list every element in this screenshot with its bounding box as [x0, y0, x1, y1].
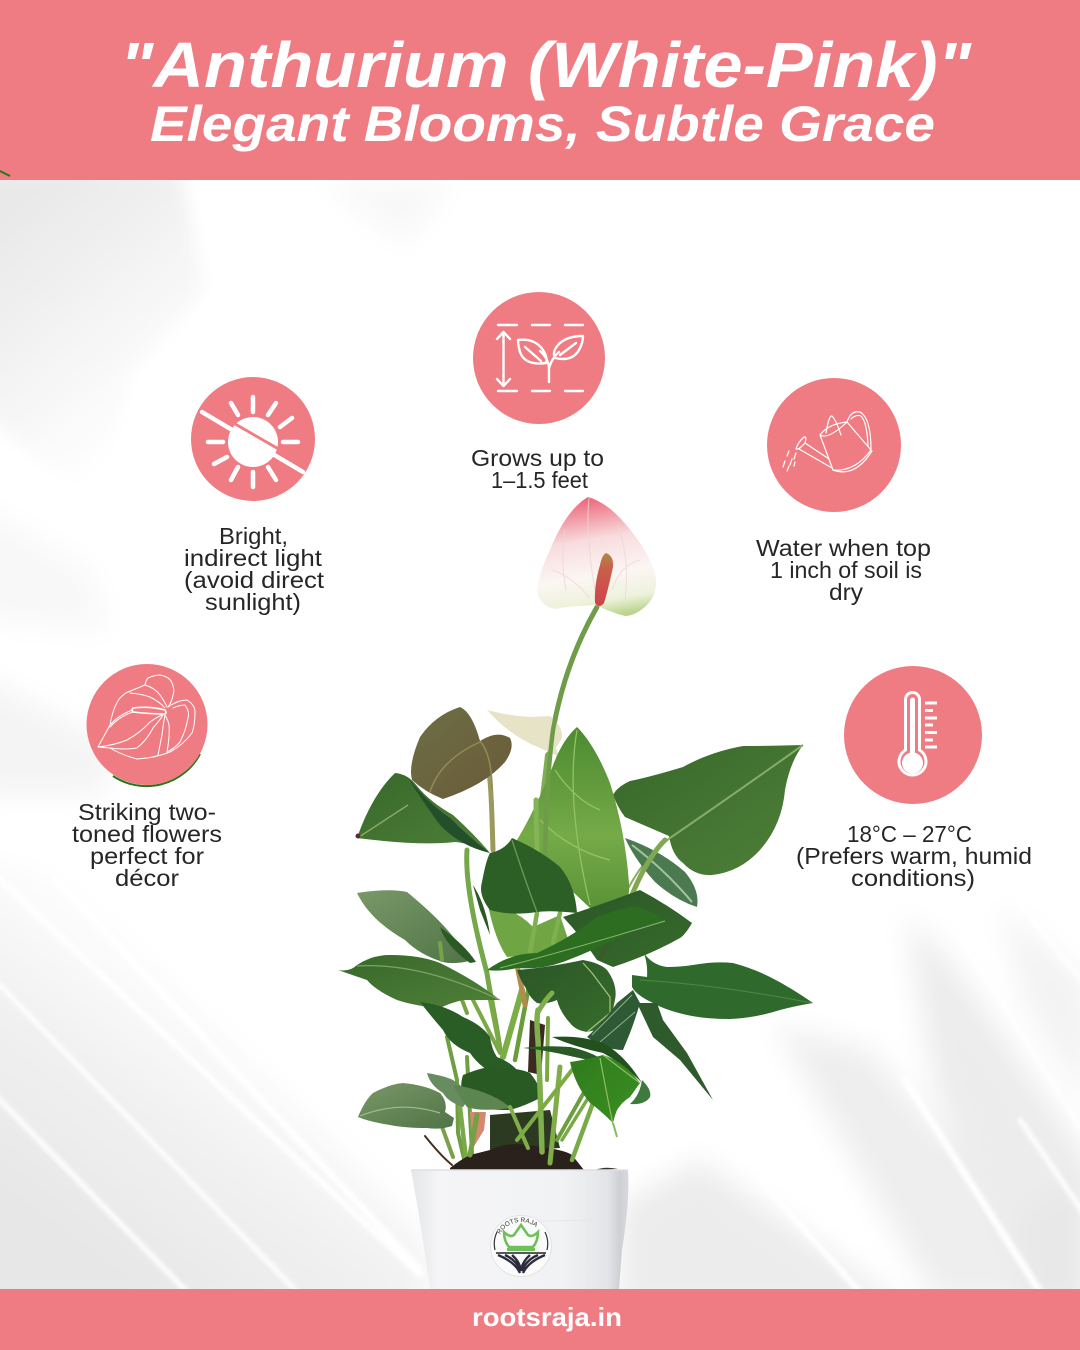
feature: flowers — [72, 664, 222, 891]
feature: height — [471, 292, 605, 493]
left dark leaf — [357, 773, 490, 853]
thin dark leaves — [523, 1046, 613, 1067]
upper pale left leaf — [357, 890, 473, 963]
text: light: (avoid direct — [184, 567, 325, 593]
text: flowers: perfect for — [90, 843, 204, 869]
central light-green leaf — [517, 727, 629, 908]
interior shadow behind stems — [528, 1020, 545, 1075]
title: "Anthurium (White-Pink)" — [120, 29, 972, 101]
subtitle: Elegant Blooms, Subtle Grace — [150, 96, 935, 152]
dark top centre leaf — [481, 838, 577, 914]
right large leaf — [613, 745, 803, 875]
text: flowers: décor — [115, 865, 179, 891]
icon: watering can — [767, 378, 901, 512]
feature: temperature — [796, 666, 1032, 891]
left dark mid leaf — [420, 1002, 517, 1077]
bright lower-right leaf — [570, 1055, 640, 1123]
leaf tip sliver at header edge — [0, 171, 10, 176]
text: height: Grows up to — [471, 445, 604, 471]
footer band — [0, 1289, 1080, 1350]
light green mid leaf — [488, 905, 570, 957]
text: temperature — [796, 821, 1032, 891]
text: temperature: conditions) — [851, 865, 975, 891]
text: temperature: 18°C – 27°C — [847, 821, 972, 847]
text: flowers: Striking two- — [78, 799, 216, 825]
text: light: Bright, — [219, 523, 288, 549]
text: flowers — [72, 799, 222, 891]
text: flowers: toned flowers — [72, 821, 222, 847]
feature: water — [756, 378, 931, 605]
dark lower-right leaves — [637, 1003, 713, 1100]
icon: anthurium outline — [86, 664, 208, 786]
striped leaf behind right — [625, 838, 698, 907]
text: light: indirect light — [184, 545, 323, 571]
icon: plant height — [473, 292, 605, 424]
plant: anthurium with pink-white bloom — [338, 497, 813, 1289]
stem cluster — [425, 943, 530, 1167]
text: light — [184, 523, 325, 615]
text: height: 1–1.5 feet — [491, 467, 588, 493]
logo sticker: ROOTS RAJA — [496, 1218, 537, 1234]
pot — [411, 1169, 628, 1289]
dark wide leaf behind — [563, 890, 692, 967]
text: temperature: (Prefers warm, humid — [796, 843, 1032, 869]
feature: light — [184, 377, 325, 615]
text: water: Water when top — [756, 535, 931, 561]
pale bract — [487, 710, 562, 757]
brown young leaf — [411, 707, 512, 799]
far-right leaf — [632, 953, 813, 1019]
text: height — [471, 445, 604, 493]
centre dark cluster — [517, 960, 616, 1032]
logo sticker — [490, 1215, 552, 1277]
header band — [0, 0, 1080, 180]
text: water: 1 inch of soil is — [770, 557, 922, 583]
text: water: dry — [829, 579, 863, 605]
front stems over soil — [470, 993, 593, 1163]
text: light: sunlight) — [205, 589, 301, 615]
bloom spathe — [537, 497, 656, 616]
icon: crossed-out sun — [191, 377, 315, 501]
soil — [450, 1144, 584, 1170]
spadix — [595, 553, 613, 606]
long left leaf — [338, 955, 500, 1008]
website: rootsraja.in — [472, 1302, 622, 1332]
back stems — [467, 607, 597, 1050]
small pale leaf — [427, 1073, 467, 1107]
lower dark leaf — [461, 1067, 542, 1110]
icon: thermometer — [844, 666, 982, 804]
text: water — [756, 535, 931, 605]
shiny bright leaf — [487, 907, 667, 971]
front bloom stems — [536, 607, 665, 905]
bottom pale left leaf — [358, 1083, 454, 1129]
